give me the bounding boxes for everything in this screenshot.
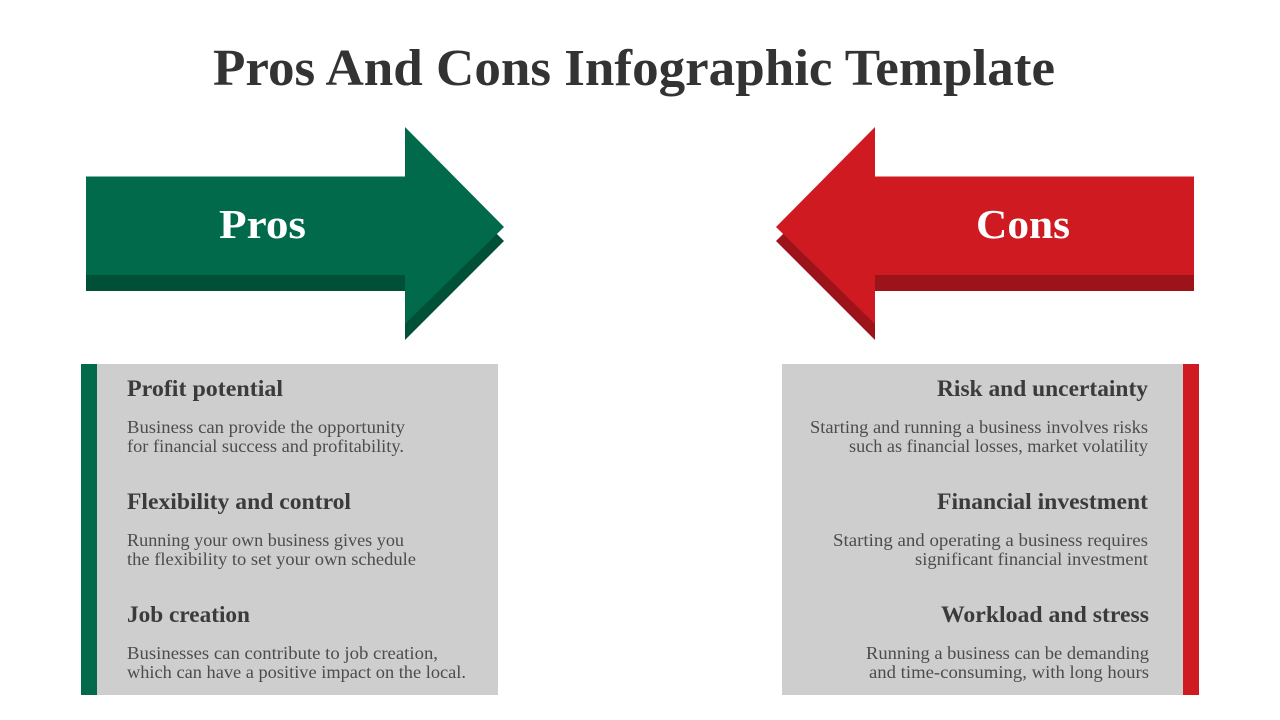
pro 3: job creation: Job creation xyxy=(127,602,250,628)
panel: pros xyxy=(81,364,498,695)
arrow: pros xyxy=(86,127,504,340)
con 1: risk and uncertainty: Starting and running a business involves risks xyxy=(810,417,1148,437)
con 3: workload and stress: Workload and stress xyxy=(941,602,1149,628)
cons label: Cons xyxy=(976,201,1070,247)
con 2: financial investment: significant financial investment xyxy=(915,549,1148,569)
pro 2: flexibility and control xyxy=(127,489,416,569)
panel: cons xyxy=(782,364,1199,695)
con 1: risk and uncertainty: such as financial losses, market volatility xyxy=(849,436,1148,456)
pro 2: flexibility and control: Running your own business gives you xyxy=(127,530,404,550)
title: Pros And Cons Infographic Template xyxy=(213,40,1055,97)
pro 1: profit potential: Business can provide the opportunity xyxy=(127,417,405,437)
pro 2: flexibility and control: Flexibility and control xyxy=(127,489,351,515)
con 2: financial investment: Starting and operating a business requires xyxy=(833,530,1148,550)
con 3: workload and stress xyxy=(866,602,1149,682)
pro 1: profit potential: Profit potential xyxy=(127,376,283,402)
con 3: workload and stress: Running a business can be demanding xyxy=(866,643,1149,663)
con 2: financial investment xyxy=(833,489,1148,569)
con 1: risk and uncertainty: Risk and uncertainty xyxy=(937,376,1148,402)
con 2: financial investment: Financial investment xyxy=(937,489,1148,515)
pro 1: profit potential: for financial success and profitability. xyxy=(127,436,404,456)
pro 2: flexibility and control: the flexibility to set your own schedule xyxy=(127,549,416,569)
pro 1: profit potential xyxy=(127,376,405,456)
pros label: Pros xyxy=(219,201,306,247)
pro 3: job creation: which can have a positive impact on the local. xyxy=(127,662,466,682)
con 3: workload and stress: and time-consuming, with long hours xyxy=(869,662,1149,682)
arrow: cons xyxy=(776,127,1194,340)
con 1: risk and uncertainty xyxy=(810,376,1148,456)
pro 3: job creation: Businesses can contribute to job creation, xyxy=(127,643,438,663)
pro 3: job creation xyxy=(127,602,466,682)
